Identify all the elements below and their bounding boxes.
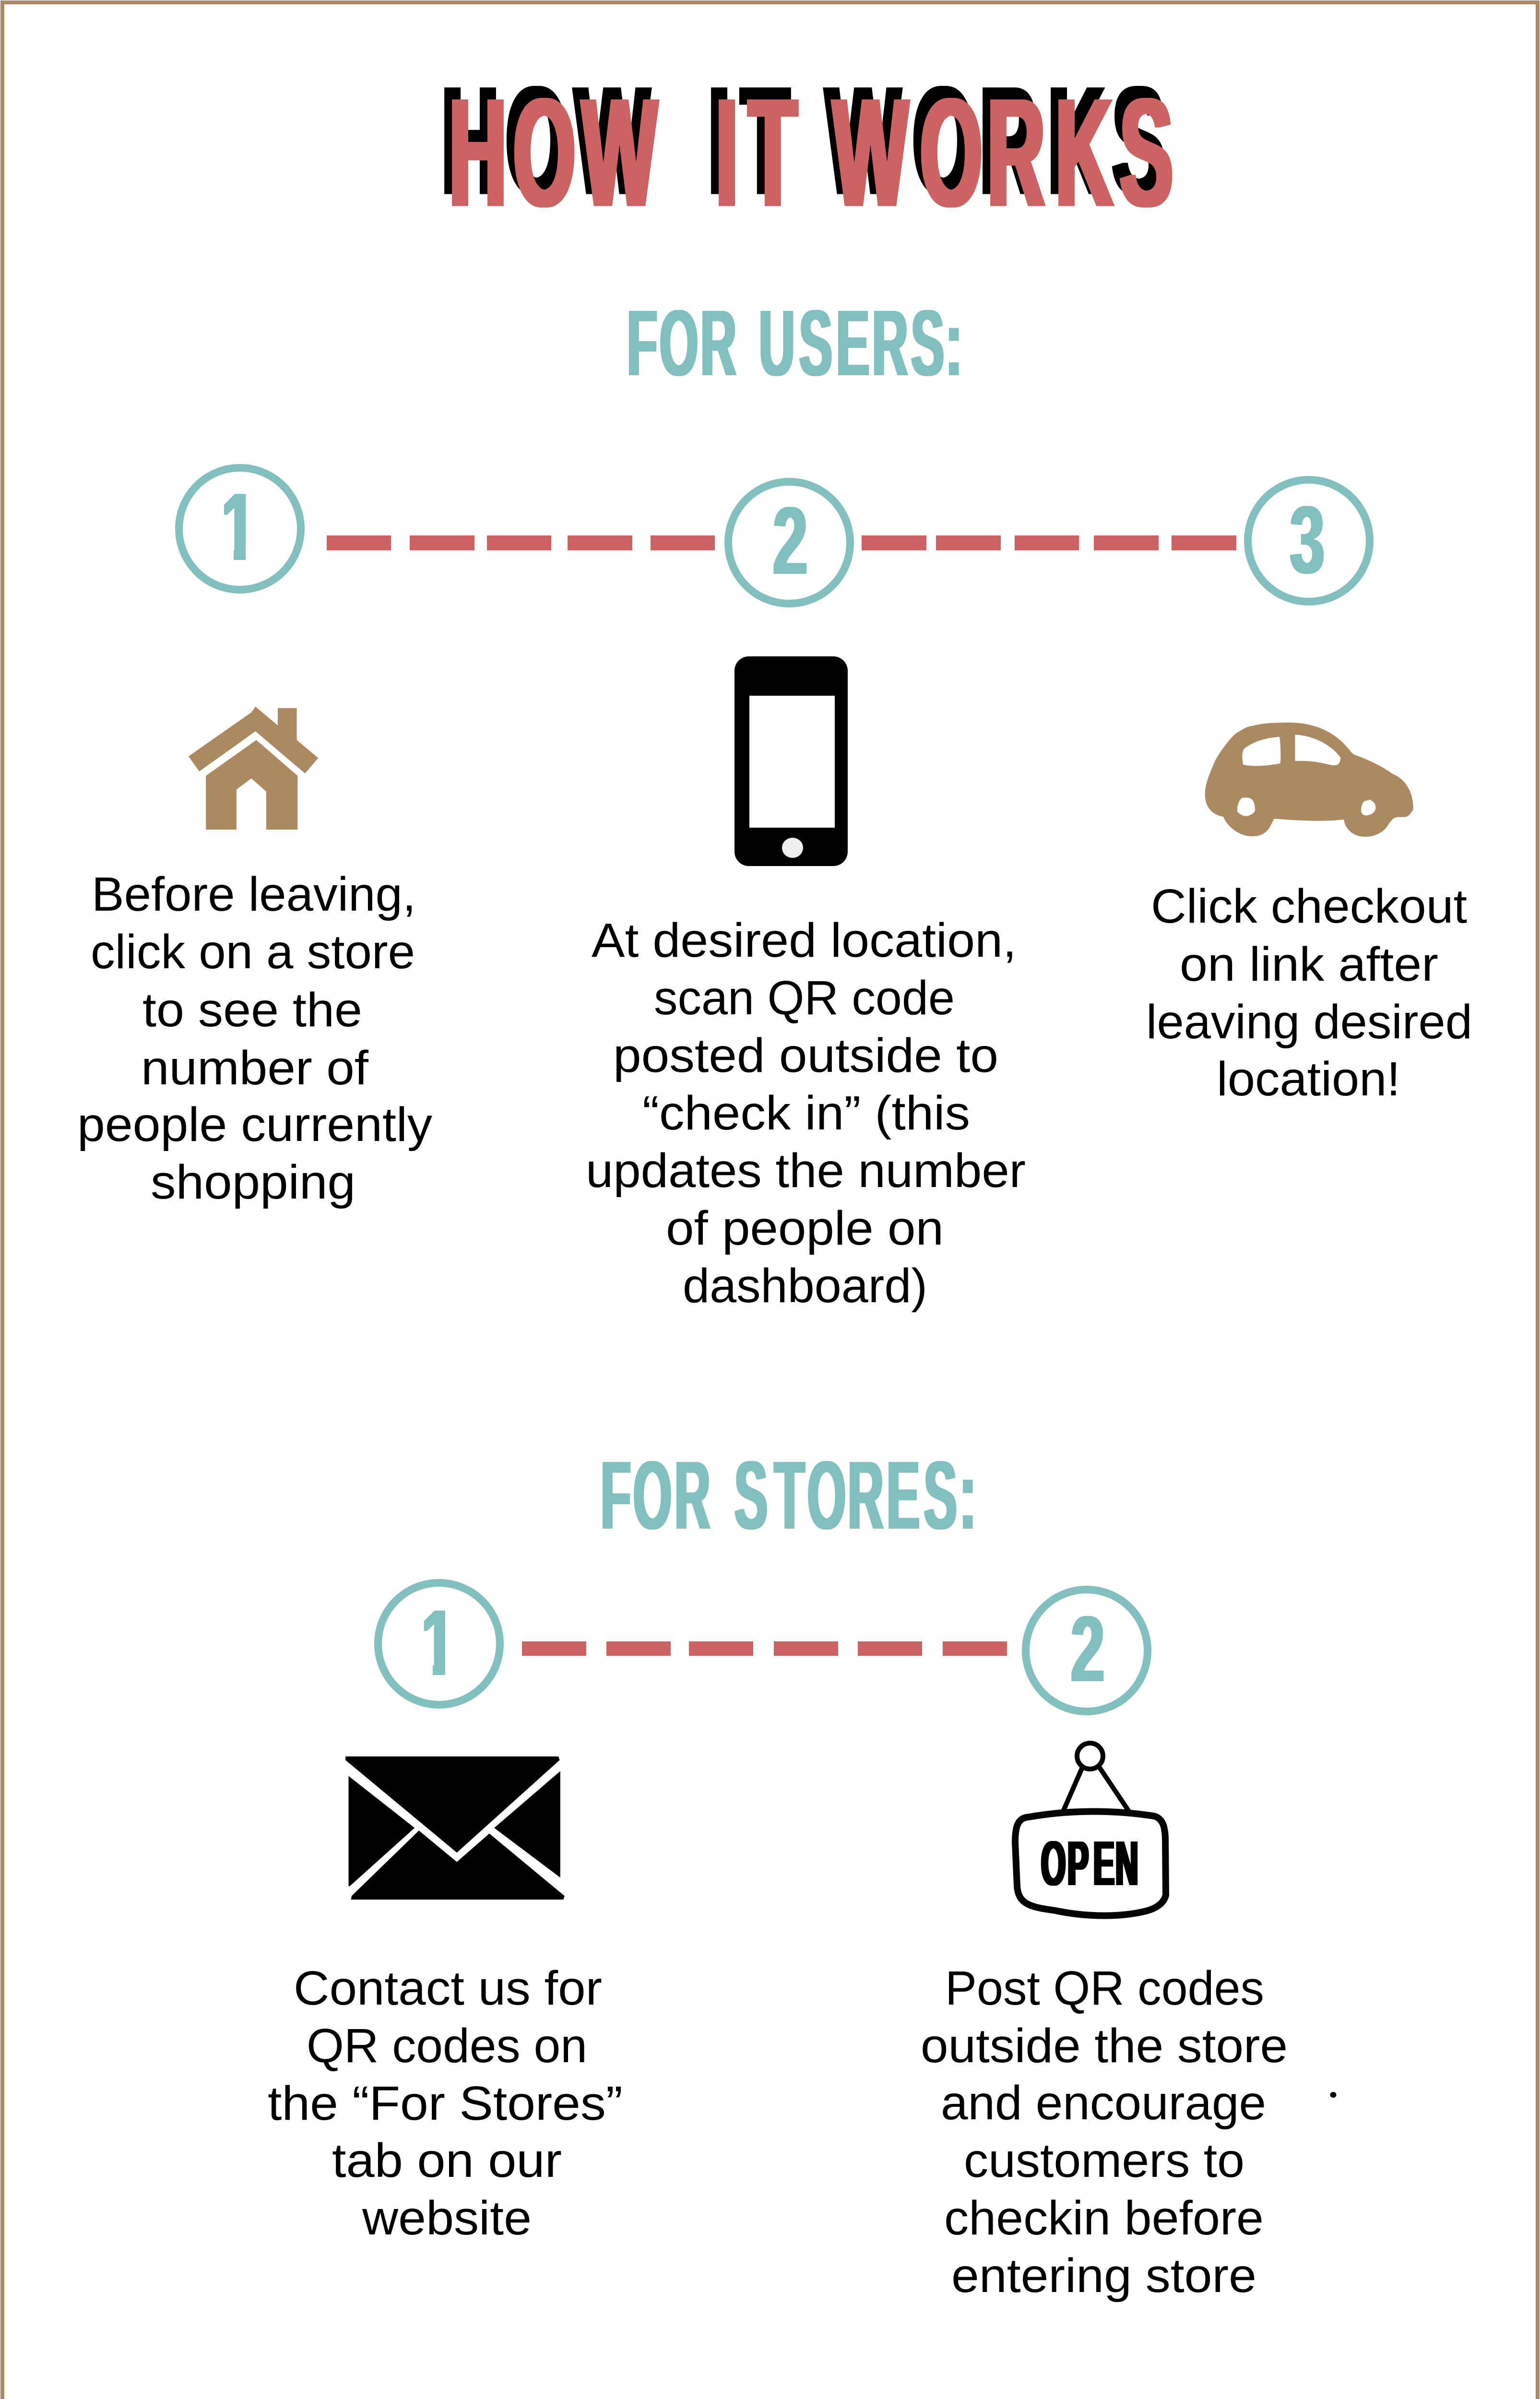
text: store step 2 description: customers to — [964, 2134, 1244, 2187]
text: step 2 description: At desired location, — [592, 914, 1017, 967]
step 2 badge — [728, 482, 850, 604]
heading: for stores: FOR STORES: — [601, 1441, 976, 1549]
text: store step 2 description — [921, 1961, 1288, 2303]
dashed connector: step 1 to 3 — [327, 535, 1236, 550]
text: step 3 description: Click checkout — [1151, 879, 1467, 933]
step 1 badge — [179, 468, 301, 590]
text: store step 1 description: website — [362, 2191, 532, 2245]
step 2 badge: 2 — [1071, 1596, 1104, 1701]
step 1 badge — [378, 1583, 500, 1705]
step 1 badge: 1 — [221, 473, 256, 581]
text: step 3 description: on link after — [1180, 938, 1438, 991]
text: store step 1 description: QR codes on — [307, 2019, 587, 2073]
text: store step 2 description: and encourage — [941, 2076, 1266, 2130]
text: store step 1 description: tab on our — [332, 2134, 562, 2187]
text: step 2 description: “check in” (this — [642, 1086, 970, 1140]
icon: house — [189, 707, 318, 830]
text: step 1 description: number of — [141, 1041, 368, 1095]
icon: envelope — [345, 1757, 565, 1900]
step 2 badge — [1026, 1590, 1148, 1711]
text: step 3 description — [1146, 879, 1472, 1106]
timeline: for stores steps — [378, 1583, 1148, 1711]
text: store step 1 description: Contact us for — [294, 1961, 602, 2015]
title: HOW IT WORKS: HOW IT WORKS — [441, 54, 1165, 227]
dashed connector: step 1 to 2 — [522, 1641, 1007, 1656]
text: store step 2 description: outside the store — [921, 2019, 1288, 2073]
text: step 1 description: to see the — [142, 983, 362, 1037]
icon: open sign — [1015, 1743, 1166, 1916]
text: step 2 description: of people on — [666, 1201, 944, 1255]
text: step 3 description: location! — [1217, 1052, 1400, 1106]
icon: open sign: OPEN — [1041, 1829, 1138, 1899]
timeline: for users steps — [179, 468, 1370, 604]
title: HOW IT WORKS: HOW IT WORKS — [449, 66, 1173, 239]
text: store step 2 description: entering store — [951, 2249, 1256, 2303]
text: step 1 description: click on a store — [91, 925, 415, 979]
step 3 badge — [1248, 480, 1370, 602]
icon: smartphone — [734, 656, 848, 866]
text: step 1 description: Before leaving, — [92, 867, 416, 921]
heading: for users: FOR USERS: — [627, 291, 962, 395]
text: step 3 description: leaving desired — [1146, 995, 1472, 1049]
text: step 2 description: scan QR code — [654, 971, 955, 1025]
step 1 badge: 1 — [421, 1590, 455, 1695]
text: store step 1 description: the “For Stores” — [268, 2077, 623, 2130]
text: step 2 description — [586, 914, 1026, 1313]
step 2 badge: 2 — [773, 487, 807, 594]
text: store step 2 description: checkin before — [944, 2191, 1264, 2245]
text: step 1 description — [77, 867, 432, 1209]
text: step 1 description: shopping — [151, 1155, 355, 1209]
icon: car — [1205, 723, 1413, 837]
text: step 2 description: posted outside to — [613, 1029, 998, 1082]
text: store step 2 description: Post QR codes — [945, 1961, 1264, 2015]
text: store step 1 description — [268, 1961, 623, 2245]
text: step 2 description: updates the number — [586, 1144, 1026, 1198]
text: step 1 description: people currently — [77, 1098, 432, 1152]
text: step 2 description: dashboard) — [683, 1259, 927, 1313]
stray dot — [1330, 2092, 1337, 2098]
step 3 badge: 3 — [1290, 486, 1325, 594]
